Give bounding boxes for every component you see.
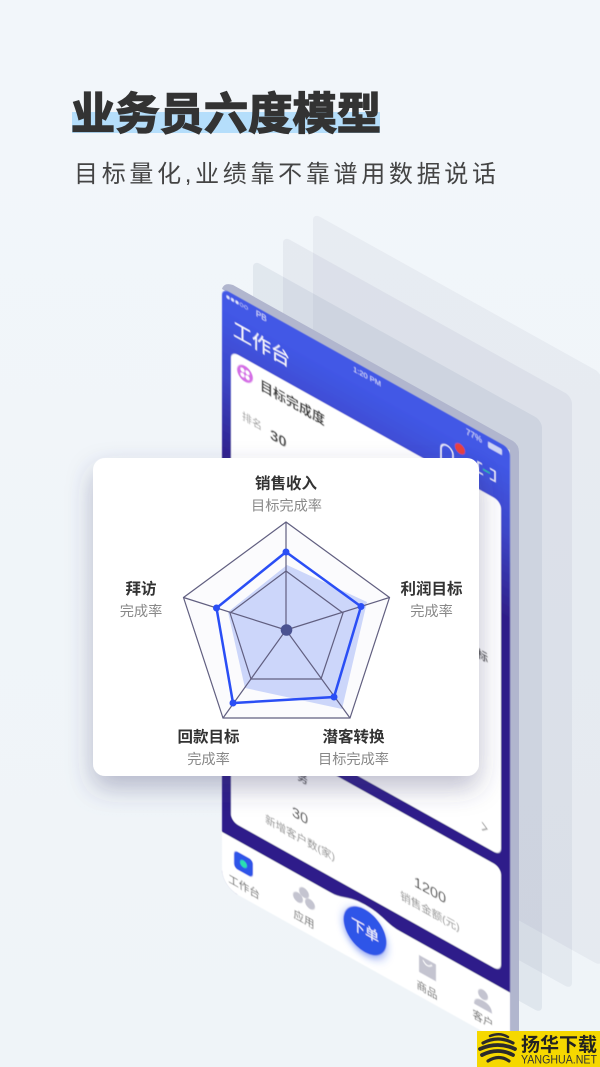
title highlight: [72, 112, 380, 133]
rank value: 30: [270, 426, 287, 452]
card icon: [237, 361, 253, 386]
label: payment: 回款目标: [177, 728, 240, 746]
label: visits: [120, 579, 162, 620]
nav: apps: 应用: [294, 907, 314, 931]
label: visits: 完成率: [120, 603, 162, 620]
radar card: [93, 458, 479, 776]
status bar: [226, 292, 502, 456]
lower card: [231, 717, 501, 972]
label: conversion: 目标完成率: [318, 751, 389, 768]
stat: new customers: 新增客户数(家): [265, 812, 335, 864]
navigation bar: [222, 825, 510, 1047]
nav: workbench: [228, 847, 260, 902]
status bar: 1:20 PM: [353, 365, 381, 389]
nav: customers: 客户: [473, 1007, 493, 1031]
nav: apps: [293, 882, 315, 932]
phone mockup: [222, 288, 510, 1047]
nav: products: 商品: [417, 977, 437, 1002]
rank label: 排名: [242, 410, 262, 433]
label: payment: [177, 728, 240, 768]
label: profit: [400, 579, 463, 620]
nav: workbench: 工作台: [228, 871, 260, 902]
stat: sales amount: 销售金额(元): [400, 888, 460, 935]
partial text: 务: [297, 769, 308, 788]
order button: 下单: [351, 916, 379, 947]
nav: products: [417, 954, 437, 1002]
stat: sales amount: 1200: [414, 874, 446, 908]
label: sales: 销售收入: [255, 474, 317, 492]
header icons: [441, 433, 495, 489]
phone edge: [222, 284, 519, 1056]
stat: new customers: [265, 789, 335, 864]
label: profit: 利润目标: [400, 579, 463, 598]
radar chart: [184, 522, 390, 718]
nav: customers: [473, 984, 493, 1031]
watermark name: 扬华下载: [521, 1034, 597, 1056]
watermark: [477, 1031, 600, 1067]
card background: [93, 458, 479, 776]
card heading: 目标完成度: [260, 377, 325, 428]
subtitle: 目标量化,业绩靠不靠谱用数据说话: [74, 161, 496, 188]
label: sales: 目标完成率: [251, 498, 322, 514]
phone screen: [222, 288, 510, 1047]
label: conversion: 潜客转换: [322, 727, 385, 746]
label: conversion: [318, 727, 389, 768]
status bar: 77%: [466, 427, 482, 445]
label: payment: 完成率: [187, 751, 230, 768]
partial right label: 标: [477, 646, 488, 665]
stat: new customers: 30: [292, 804, 308, 829]
background layers: [253, 213, 600, 1014]
stat: sales amount: [400, 866, 460, 935]
center dot: [281, 624, 292, 636]
upper card: [231, 351, 501, 856]
screen heading: 工作台: [233, 318, 290, 372]
order button: [344, 897, 386, 964]
title: 业务员六度模型: [71, 90, 381, 139]
chevron: [482, 822, 487, 833]
status bar: PB: [256, 309, 267, 324]
label: profit: 完成率: [410, 603, 453, 620]
target area: [228, 565, 367, 709]
watermark logo: [480, 1034, 515, 1061]
actual line: [216, 552, 361, 703]
label: sales: [251, 474, 322, 514]
label: visits: 拜访: [125, 579, 157, 598]
